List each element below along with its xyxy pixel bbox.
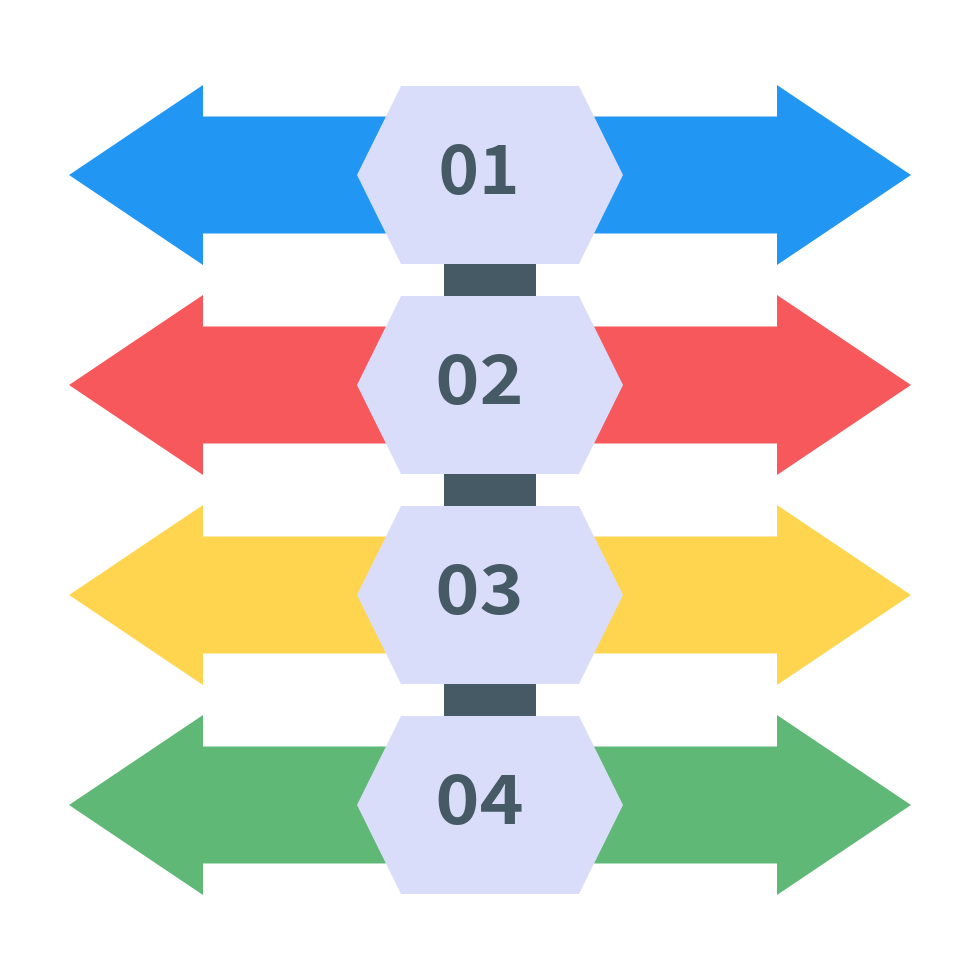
step 03: [69, 505, 911, 685]
double arrow: red: [69, 295, 911, 475]
hexagon: 03: [357, 506, 623, 684]
number: 04: 04: [435, 745, 524, 844]
step 01: [69, 85, 911, 265]
connector: 01 to 02: [444, 262, 536, 298]
double arrow: blue: [69, 85, 911, 265]
hexagon: 04: [357, 716, 623, 894]
double arrow: yellow: [69, 505, 911, 685]
step 02: [69, 295, 911, 475]
connector: 02 to 03: [444, 472, 536, 508]
number: 02: 02: [435, 325, 524, 424]
hexagon: 02: [357, 296, 623, 474]
step 04: [69, 715, 911, 895]
hexagon: 01: [357, 86, 623, 264]
number: 03: 03: [435, 535, 524, 634]
connector: 03 to 04: [444, 682, 536, 718]
double arrow: green: [69, 715, 911, 895]
number: 01: 01: [438, 115, 520, 214]
